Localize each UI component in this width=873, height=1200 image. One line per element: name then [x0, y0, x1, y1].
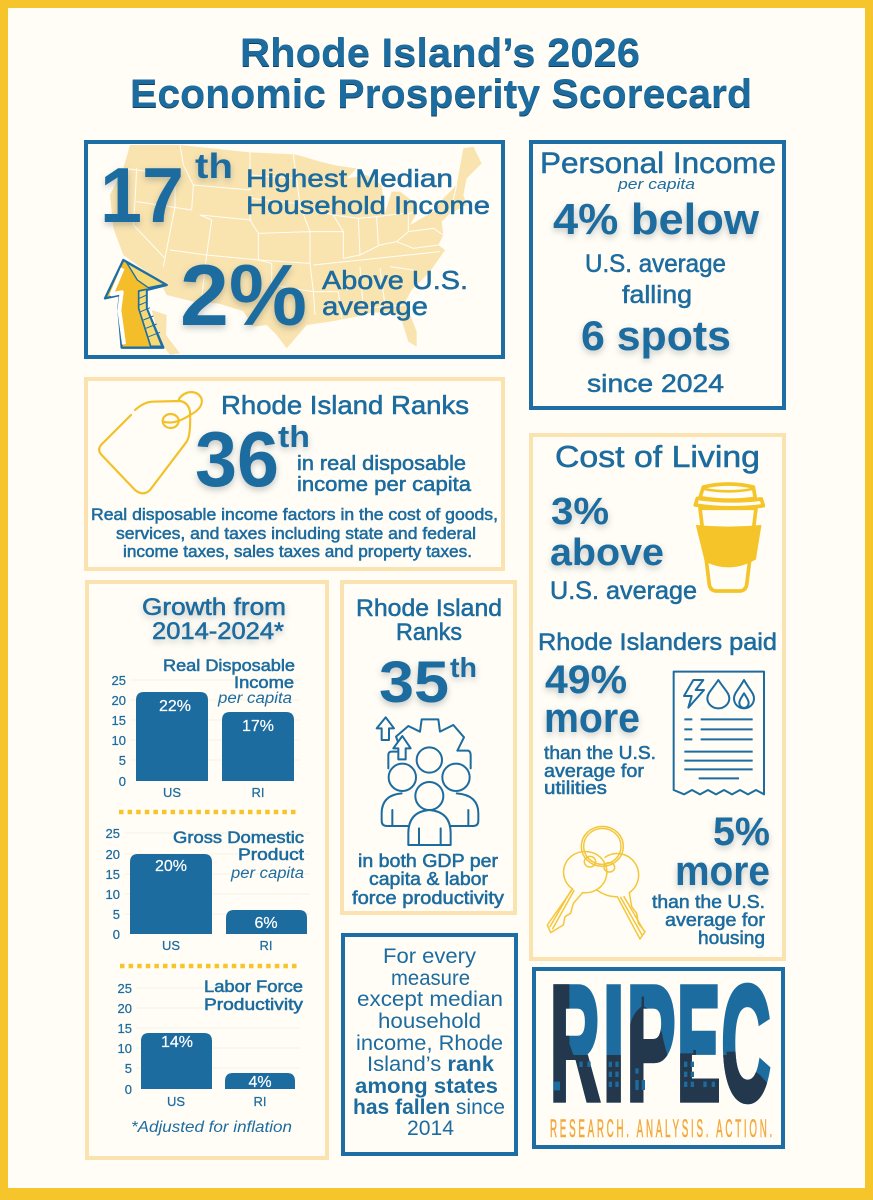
label: in real disposable income per capita: in real disposable	[297, 453, 466, 475]
y axis labels: 10	[118, 1041, 132, 1056]
y axis labels: 5	[125, 1061, 132, 1076]
rank 35th: th	[450, 652, 477, 683]
note text: income, Rhode	[356, 1032, 503, 1055]
y axis labels	[112, 673, 126, 789]
y axis labels: 0	[125, 1082, 132, 1097]
title: Economic Prosperity Scorecard	[130, 72, 752, 116]
panel: RIPEC logo: C	[721, 952, 771, 1135]
panel: real disposable income	[86, 379, 503, 569]
chart title: Product	[238, 846, 304, 864]
y axis labels	[118, 981, 132, 1097]
text: in both GDP per capita and labor force productivity: capita & labor	[369, 869, 488, 889]
icon: utility bill	[674, 672, 764, 794]
bar chart: gross domestic product	[106, 826, 310, 953]
panel: RIPEC logo	[534, 952, 783, 1147]
y axis labels: 25	[112, 673, 126, 688]
bar: RI 17%	[222, 712, 294, 781]
frame	[531, 435, 784, 959]
icon: keys	[547, 826, 645, 939]
y axis labels: 10	[112, 733, 126, 748]
y axis labels: 15	[118, 1021, 132, 1036]
chart title: Labor Force	[204, 978, 303, 996]
category labels: US	[162, 938, 180, 953]
label: highest median household income: Highest Median	[246, 165, 453, 193]
map of the United States	[110, 145, 482, 355]
chart title	[204, 978, 304, 1014]
heading: Rhode Island	[356, 595, 502, 622]
heading: Rhode Islanders paid: Rhode Islanders paid	[538, 629, 777, 656]
category labels: US	[167, 1094, 185, 1109]
y axis labels: 15	[106, 867, 120, 882]
panel: median household income	[86, 142, 503, 357]
note text: Island’s rank	[367, 1053, 494, 1076]
rank 17th: 17	[100, 151, 184, 239]
y axis labels: 5	[113, 907, 120, 922]
stat: 5% more: 5%	[713, 810, 770, 854]
y axis labels: 20	[106, 847, 120, 862]
chart title: per capita	[230, 865, 304, 882]
note text: measure	[391, 967, 470, 990]
label: utilities: than the U.S.	[544, 743, 656, 763]
logo wordmark: E	[677, 952, 720, 1135]
y axis labels: 0	[113, 927, 120, 942]
chart title	[163, 657, 295, 707]
logo wordmark	[553, 982, 770, 1104]
label: above U.S. average: average	[322, 291, 428, 321]
frame	[86, 142, 503, 357]
rank 17th: th	[195, 147, 233, 186]
label: housing	[652, 892, 765, 948]
heading	[356, 595, 502, 646]
bar chart: labor force productivity	[118, 978, 304, 1109]
rank 17th	[100, 147, 233, 239]
bar chart: real disposable income	[112, 657, 300, 800]
value labels: 20%	[155, 858, 187, 875]
explanation text	[91, 505, 498, 561]
stat: 5% more: more	[675, 847, 770, 894]
panel: rank has fallen note	[343, 935, 516, 1154]
icon: price tag	[99, 392, 202, 493]
explanation text: income taxes, sales taxes and property taxes.	[123, 542, 472, 561]
label: housing: average for	[665, 910, 765, 930]
explanation text: Real disposable income factors in the cost of goods,	[91, 505, 498, 524]
footnote: *Adjusted for inflation	[131, 1119, 292, 1136]
label: highest median household income	[246, 165, 490, 220]
label: housing: housing	[698, 928, 765, 948]
text: in both GDP per capita and labor force productivity	[352, 851, 504, 908]
logo wordmark: I	[603, 952, 625, 1135]
stat: 3% above: 3%	[551, 491, 609, 533]
rank 35th	[379, 650, 477, 715]
note text: 2014	[407, 1117, 454, 1140]
bar: US 20%	[130, 854, 212, 934]
stat: 4% below: 4% below	[553, 195, 760, 244]
y axis labels: 5	[119, 753, 126, 768]
label: U.S. average: U.S. average	[550, 577, 697, 605]
text: U.S. average falling: falling	[622, 281, 692, 309]
label: in real disposable income per capita	[297, 453, 472, 496]
category labels: RI	[254, 1094, 266, 1109]
heading: Growth from	[142, 594, 286, 621]
chart title: Gross Domestic	[173, 829, 304, 847]
heading: Rhode Island Ranks	[221, 390, 469, 420]
panel: cost of living	[531, 435, 784, 959]
value labels: 14%	[161, 1034, 193, 1051]
category labels	[167, 1094, 266, 1109]
rank 35th: 35	[379, 650, 449, 715]
frame	[534, 969, 783, 1147]
category labels	[162, 938, 272, 953]
text: since 2024: since 2024	[587, 370, 724, 398]
logo wordmark: R	[550, 952, 600, 1135]
frame	[86, 379, 503, 569]
stat: 6 spots: 6 spots	[581, 312, 731, 359]
category labels: RI	[260, 938, 272, 953]
stat: 49% more: more	[544, 694, 640, 741]
y axis labels: 0	[119, 774, 126, 789]
stat: 49% more	[544, 658, 640, 741]
panel: GDP and labor force rank	[342, 582, 515, 913]
logo wordmark: P	[627, 952, 676, 1135]
heading: Ranks	[396, 619, 462, 646]
text: U.S. average falling	[585, 250, 726, 309]
icon: up arrow	[105, 260, 167, 348]
explanation text: services, and taxes including state and federal	[116, 524, 476, 543]
heading: Personal Income	[540, 147, 776, 180]
label: in real disposable income per capita: income per capita	[297, 474, 472, 496]
y axis labels: 15	[112, 713, 126, 728]
stat: 3% above	[550, 491, 664, 574]
y axis labels: 20	[112, 693, 126, 708]
rank 36th: th	[278, 419, 310, 454]
value labels	[159, 698, 274, 735]
title	[130, 31, 752, 116]
icon: coffee cup	[695, 484, 763, 591]
frame	[531, 142, 784, 408]
label: housing: than the U.S.	[652, 892, 765, 912]
value labels: 6%	[254, 915, 278, 932]
frame	[87, 582, 327, 1158]
label: utilities: average for	[544, 761, 644, 781]
y axis labels: 20	[118, 1001, 132, 1016]
text: U.S. average falling: U.S. average	[585, 250, 726, 278]
panel: RIPEC logo: C	[721, 952, 771, 1135]
bar: RI 4%	[225, 1073, 295, 1089]
label: highest median household income: Household Income	[246, 192, 490, 220]
text: in both GDP per capita and labor force productivity: force productivity	[352, 888, 504, 908]
icon: team with gear and arrows	[377, 717, 478, 845]
y axis labels	[106, 826, 120, 942]
bar: US 14%	[141, 1033, 212, 1089]
label: above U.S. average	[322, 265, 468, 321]
y axis labels: 25	[106, 826, 120, 841]
value labels	[161, 1034, 272, 1091]
text: in both GDP per capita and labor force productivity: in both GDP per	[358, 851, 498, 871]
frame	[343, 935, 516, 1154]
note text: For every	[383, 945, 477, 968]
bar: RI 6%	[226, 910, 307, 934]
logo wordmark: E	[677, 952, 720, 1135]
bar: US 22%	[136, 692, 208, 781]
stat: 49% more: 49%	[545, 658, 627, 702]
note text: has fallen since	[353, 1096, 505, 1119]
category labels: US	[163, 785, 181, 800]
heading: 2014-2024*	[152, 618, 284, 645]
note text: household	[378, 1010, 481, 1033]
frame	[342, 582, 515, 913]
note text: among states	[355, 1075, 498, 1098]
sub-label: per capita	[617, 176, 695, 193]
chart title: per capita	[217, 690, 292, 707]
logo wordmark: I	[603, 952, 625, 1135]
value labels: 22%	[159, 698, 191, 715]
y axis labels: 10	[106, 887, 120, 902]
y axis labels: 25	[118, 981, 132, 996]
stat: 3% above: above	[550, 532, 664, 574]
note text	[353, 945, 505, 1140]
value labels: 17%	[242, 718, 274, 735]
chart title: Income	[234, 674, 294, 692]
value labels	[155, 858, 278, 932]
stat: 2 percent: 2%	[180, 248, 307, 344]
chart title	[173, 829, 304, 882]
rank 36th: 36	[195, 415, 279, 503]
stat: 5% more	[675, 810, 770, 894]
label: utilities	[544, 743, 656, 798]
panel: personal income	[531, 142, 784, 408]
panel: growth charts	[87, 582, 327, 1158]
category labels: RI	[252, 785, 264, 800]
chart title: Real Disposable	[163, 657, 295, 675]
note text: except median	[357, 988, 503, 1011]
value labels: 4%	[248, 1074, 272, 1091]
title: Rhode Island’s 2026	[240, 31, 640, 75]
logo wordmark: R	[550, 952, 600, 1135]
heading	[142, 594, 286, 645]
chart title: Productivity	[204, 996, 304, 1014]
heading: Cost of Living	[555, 439, 760, 474]
label: utilities: utilities	[544, 778, 607, 798]
logo wordmark: P	[627, 952, 676, 1135]
label: above U.S. average: Above U.S.	[322, 265, 468, 295]
category labels	[163, 785, 264, 800]
